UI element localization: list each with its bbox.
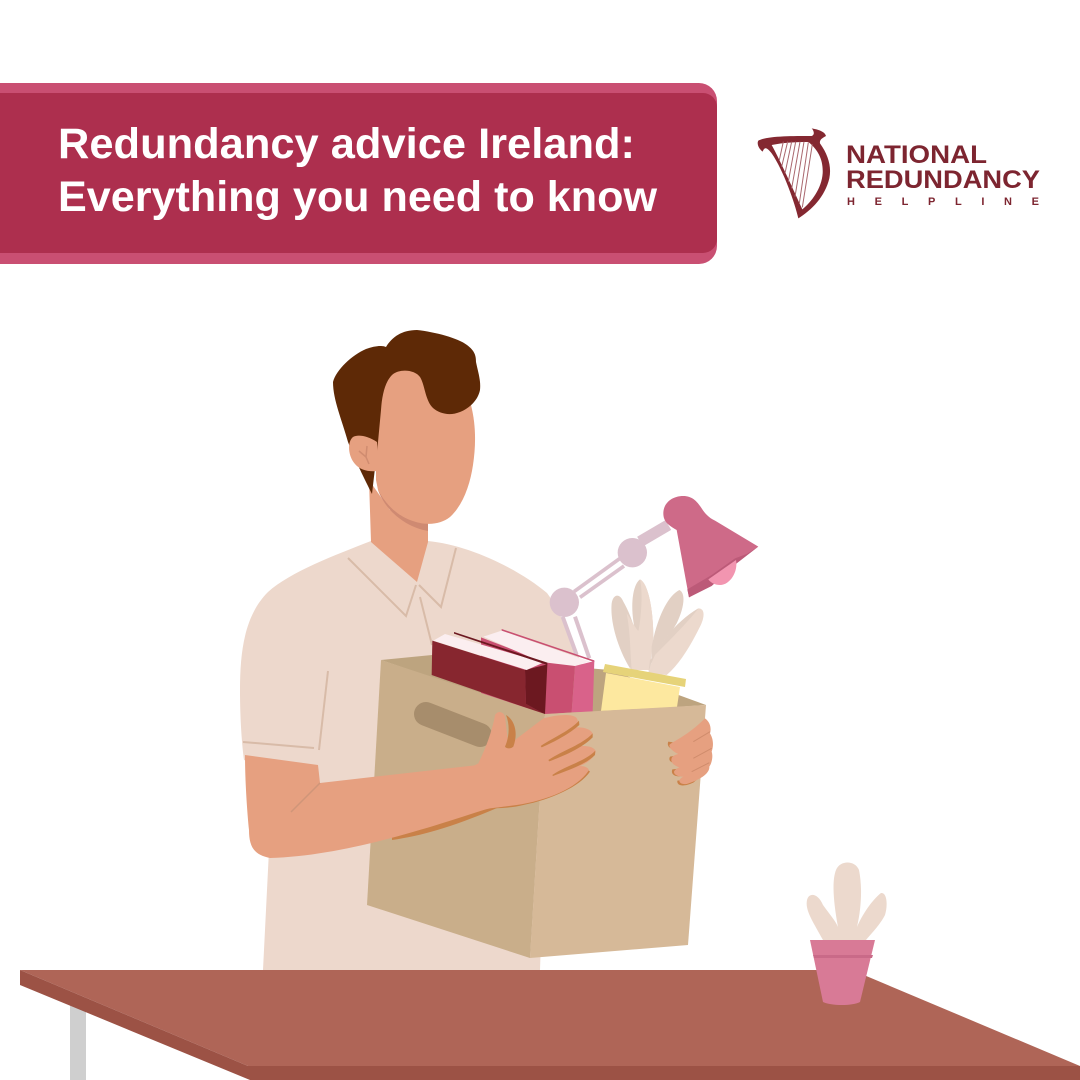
plant in box (611, 579, 704, 675)
hand shadow (483, 769, 590, 808)
pot (810, 940, 875, 1005)
logo wordmark: NATIONAL (846, 141, 987, 169)
face (376, 362, 475, 524)
shirt creases (243, 548, 456, 750)
finger shadows (668, 742, 698, 786)
neck shadow (378, 490, 428, 531)
yellow container (601, 664, 686, 711)
thumb crease (505, 715, 516, 748)
elbow crease (291, 783, 320, 812)
illustration: left hand (668, 718, 713, 786)
illustration: potted plant (807, 862, 887, 1005)
finger lines (692, 732, 712, 772)
ear (349, 436, 378, 471)
lamp (550, 496, 758, 658)
desk top (20, 970, 1080, 1066)
pink book (481, 629, 594, 714)
hand shape (669, 718, 713, 784)
title text (58, 120, 658, 221)
lamp arms (563, 525, 668, 658)
lamp bulb (708, 560, 736, 585)
box inner back (381, 655, 706, 716)
box left face (367, 660, 545, 958)
lamp shade (663, 496, 758, 597)
arm shadow (392, 800, 497, 840)
box right face (530, 705, 706, 958)
title text: Everything you need to know (58, 173, 658, 221)
plant leaves (807, 862, 887, 940)
logo wordmark (846, 141, 1040, 208)
illustration: arm and right hand (245, 712, 596, 858)
title text: Redundancy advice Ireland: (58, 120, 635, 168)
logo wordmark: HELPLINE (847, 196, 1039, 208)
logo wordmark: REDUNDANCY (846, 166, 1040, 194)
illustration: desk (20, 970, 1080, 1080)
finger lines (541, 721, 579, 747)
palm and fingers (467, 712, 596, 813)
hand (467, 712, 596, 813)
arm (245, 755, 500, 858)
box handle (426, 714, 480, 735)
illustration: man (240, 330, 590, 970)
title banner (0, 83, 717, 264)
hair (333, 330, 480, 494)
shirt (240, 541, 590, 970)
desk front edge (20, 970, 1080, 1080)
neck (369, 480, 428, 582)
dark red book (432, 632, 547, 714)
illustration: cardboard box with contents (367, 496, 758, 958)
logo: National Redundancy Helpline (758, 128, 1040, 218)
illustration: table leg (70, 1000, 86, 1080)
icon: harp (758, 128, 830, 218)
